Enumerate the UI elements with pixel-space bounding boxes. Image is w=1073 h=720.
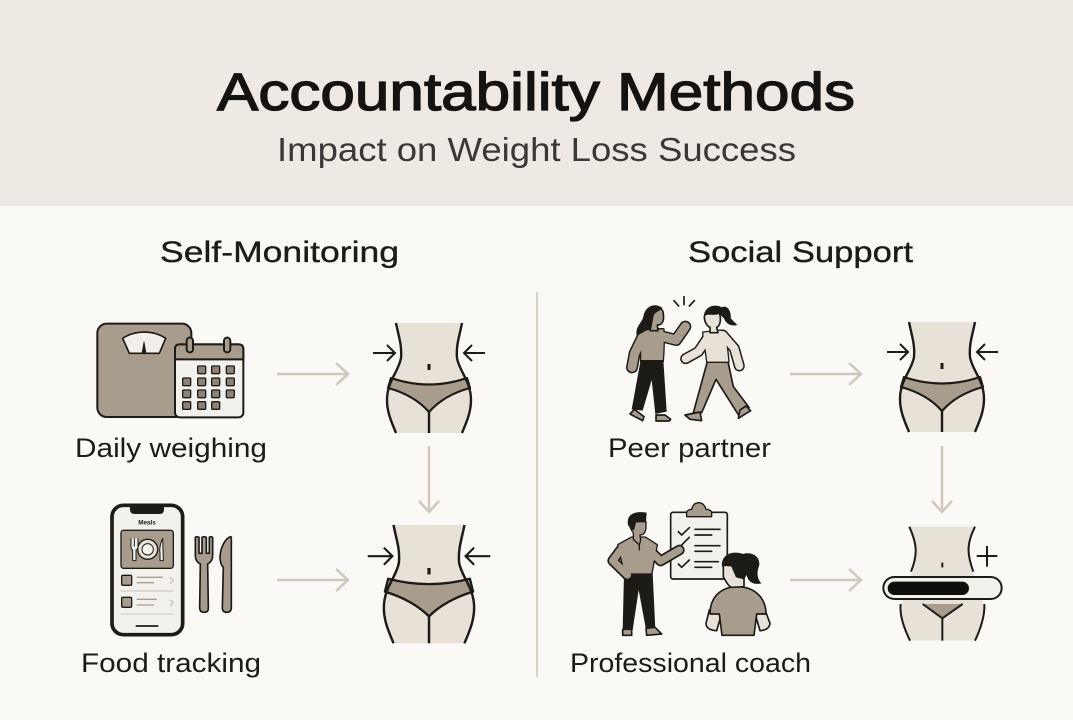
title: Accountability Methods bbox=[217, 63, 855, 122]
icon: peer partners bbox=[630, 297, 751, 421]
panel: social support bbox=[570, 297, 1002, 678]
heading: social support: Social Support bbox=[688, 236, 914, 269]
icon: slimmer waist with arrows bbox=[368, 525, 490, 643]
arrow: down bbox=[932, 446, 952, 512]
arrow: to waist bbox=[790, 363, 861, 385]
arrow: to waist bbox=[277, 569, 348, 591]
arrow: to waist bbox=[277, 363, 348, 385]
header band bbox=[0, 0, 1073, 206]
icon: professional coach with client bbox=[613, 503, 770, 635]
label: professional coach: Professional coach bbox=[570, 648, 811, 678]
icon: waist with arrows bbox=[887, 322, 998, 432]
arrow: down bbox=[419, 446, 439, 512]
panel: self-monitoring bbox=[75, 323, 490, 678]
arrow: to waist bbox=[790, 569, 861, 591]
subtitle: Impact on Weight Loss Success bbox=[277, 131, 796, 168]
label: peer partner: Peer partner bbox=[608, 433, 771, 463]
label: daily weighing: Daily weighing bbox=[75, 433, 267, 463]
icon: scale and calendar bbox=[97, 324, 243, 417]
icon: phone and cutlery: Meals bbox=[138, 520, 156, 527]
heading: self-monitoring: Self-Monitoring bbox=[160, 236, 399, 269]
icon: phone and cutlery bbox=[112, 505, 231, 635]
icon: waist with progress bar bbox=[883, 527, 1002, 641]
icon: waist with arrows bbox=[373, 323, 485, 433]
label: food tracking: Food tracking bbox=[81, 648, 261, 678]
